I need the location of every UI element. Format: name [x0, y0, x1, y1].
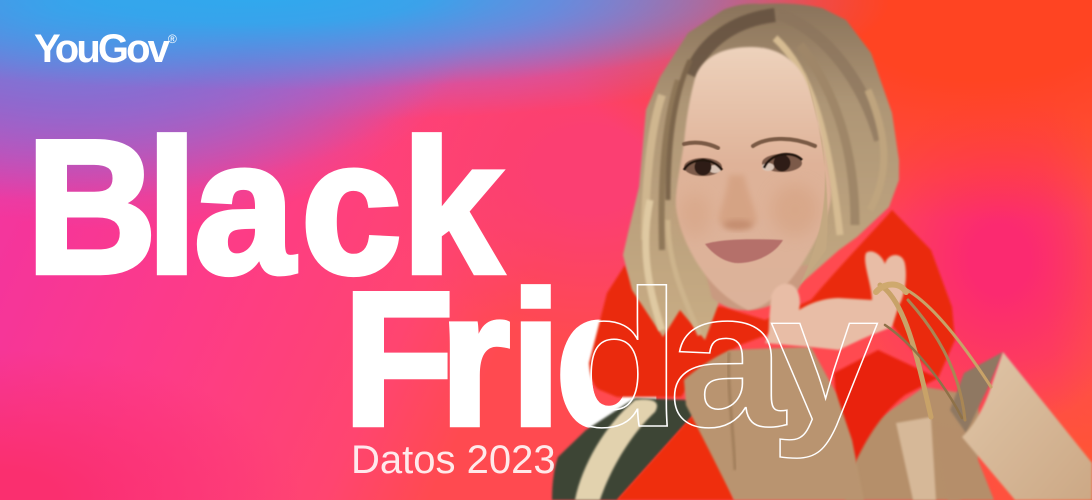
small bag	[896, 417, 936, 500]
large paper bag	[962, 352, 1092, 500]
hand	[765, 251, 906, 350]
upper scarf	[589, 210, 955, 397]
logo: YouGov: YouGov	[34, 27, 171, 71]
nose tip	[723, 220, 753, 230]
right scarf	[834, 350, 938, 478]
cheek shading	[771, 184, 819, 236]
left cheek shading	[679, 193, 711, 237]
lower scarf	[617, 413, 734, 500]
rope handles	[876, 284, 991, 420]
middle bag	[936, 425, 994, 500]
title word: day outlined: da	[552, 250, 788, 468]
long hair lower left	[575, 399, 657, 500]
title word: day outlined: y	[770, 255, 878, 460]
neck	[705, 265, 810, 310]
hair strand over right of face	[800, 70, 828, 285]
hair texture strands	[645, 14, 884, 335]
title word: Black: Black	[26, 101, 503, 314]
eyes	[684, 154, 802, 176]
hair mass	[623, 3, 899, 340]
sleeve	[684, 347, 864, 500]
coat	[845, 387, 985, 500]
mouth	[705, 239, 783, 263]
subtitle: Datos 2023: Datos 2023	[351, 438, 556, 482]
bag inner	[950, 352, 1003, 433]
logo: YouGov: ®	[168, 32, 177, 46]
eyebrows	[684, 139, 815, 148]
nose	[719, 175, 757, 230]
dark sweater	[552, 398, 695, 500]
face	[676, 47, 831, 310]
photo: woman with shopping bags	[552, 3, 1092, 500]
title word: Frid filled part: Frid	[343, 253, 666, 466]
sleeve seam	[729, 352, 735, 470]
